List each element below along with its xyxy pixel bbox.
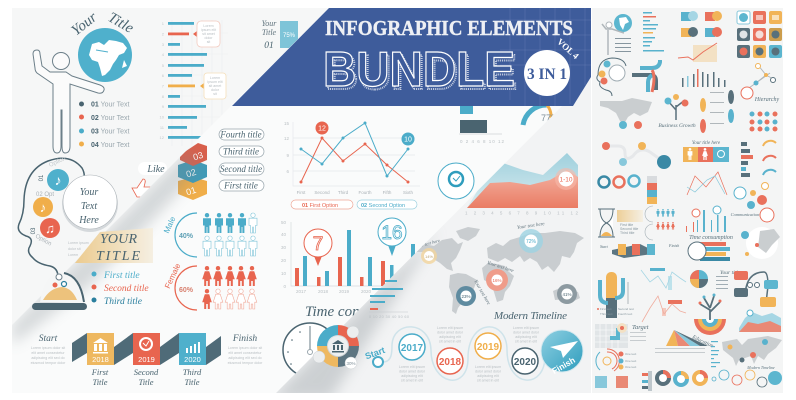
line chart: Third bbox=[338, 190, 349, 195]
alarm circle icon bbox=[438, 163, 474, 199]
legend: 03 Your Text bbox=[91, 128, 129, 136]
stacked blocks bbox=[178, 143, 207, 200]
pin: 7 bbox=[304, 229, 332, 266]
callout: upper: Lorem bbox=[203, 24, 214, 28]
mini bar chart: 1 bbox=[162, 21, 165, 26]
donut chart: 30% bbox=[346, 361, 356, 366]
finish label: Lorem ipsum dolor sit bbox=[228, 346, 262, 350]
head icon 02: 02 Opt bbox=[36, 192, 54, 198]
timeline text blocks: Lorem elit ipsum bbox=[513, 326, 539, 330]
list of titles: Third title bbox=[104, 297, 142, 307]
thumb: people tiles: Your title here bbox=[692, 141, 721, 146]
column chart: 2017 bbox=[296, 289, 307, 294]
77 percent gauge bbox=[520, 106, 554, 126]
year 2018 bbox=[437, 348, 463, 374]
tile captions: Title bbox=[138, 377, 154, 387]
mini bar chart bbox=[160, 22, 222, 139]
map bubble: 16%: 16% bbox=[492, 278, 502, 283]
thumb: time consumption: Time consumption bbox=[689, 235, 733, 241]
mini bar chart: 9 bbox=[162, 104, 165, 109]
start label: adipiscing elit sed do bbox=[31, 356, 65, 360]
head icon 01 note bbox=[39, 156, 69, 191]
line chart: 12 bbox=[318, 126, 326, 132]
panel: banner bbox=[232, 8, 591, 106]
ribbon timeline bbox=[72, 333, 221, 365]
clock bbox=[282, 322, 328, 374]
column chart: 0 bbox=[283, 284, 286, 289]
male outline people bbox=[203, 213, 257, 256]
lorem text: Lorem ipsum bbox=[68, 241, 89, 245]
timeline text blocks: dolor amet dolor bbox=[399, 370, 426, 374]
lorem text bbox=[68, 242, 88, 256]
line chart: 12 bbox=[284, 136, 289, 141]
timeline text blocks: adipiscing elit bbox=[439, 335, 461, 339]
area chart: 1-10 bbox=[559, 176, 573, 184]
title 01 block: 75% bbox=[283, 33, 296, 39]
column chart: 2020 bbox=[361, 289, 372, 294]
pin: 7: 7 bbox=[313, 234, 323, 255]
map bubble: 72%: 72% bbox=[526, 239, 537, 245]
line chart: 9 bbox=[286, 153, 289, 158]
mini bar chart: 5 bbox=[162, 63, 165, 68]
thumb: dark bars and gauges bbox=[741, 141, 776, 177]
timeline text blocks: Lorem elit ipsum bbox=[437, 326, 463, 330]
thumb: glasses head bbox=[734, 271, 778, 307]
horizontal mini bars: 0 10 20 30 40 50 60 bbox=[369, 315, 409, 319]
line chart bbox=[284, 121, 420, 195]
globe bbox=[78, 28, 132, 82]
head icon 01 note: ♪ bbox=[54, 172, 62, 188]
bundle word: BUNDLE bbox=[325, 46, 517, 100]
stick figure bbox=[33, 50, 104, 153]
world map bbox=[415, 227, 584, 314]
finish label bbox=[228, 334, 263, 365]
head outline bbox=[18, 158, 84, 277]
start label: Lorem ipsum dolor sit bbox=[31, 346, 65, 350]
chart legend pills bbox=[291, 200, 417, 209]
timeline text blocks: dolor amet dolor bbox=[437, 330, 464, 334]
legend: 02 Your Text bbox=[91, 115, 129, 122]
thumb: cactus chart bbox=[597, 272, 634, 318]
timeline text blocks: sit amet in elit bbox=[401, 378, 423, 382]
thumb: time consumption bbox=[688, 235, 733, 261]
your title gold banner: TITLE bbox=[96, 249, 140, 264]
legend: 04 Your Text bbox=[91, 142, 129, 149]
thumb: europe globe bbox=[741, 227, 780, 259]
stacked blocks: 03 bbox=[192, 150, 204, 162]
start label: eiusmod tempor dolor bbox=[31, 361, 66, 365]
callout: lower: ipsum elit bbox=[207, 80, 223, 84]
male gauge: Male bbox=[162, 215, 178, 235]
panel: thumbnail collage bbox=[592, 8, 783, 393]
thumb: icon tiles bbox=[737, 11, 782, 58]
title pills: Third title bbox=[223, 146, 259, 156]
thumb: map with bubbles bbox=[722, 336, 782, 366]
speech circle: Text bbox=[81, 201, 97, 212]
map bubble: 16% bbox=[486, 261, 515, 291]
thumb: growth chart bbox=[678, 43, 717, 62]
timeline text blocks: adipiscing elit bbox=[477, 374, 499, 378]
thumb: business growth tree bbox=[658, 94, 696, 129]
pin: 16 bbox=[378, 218, 406, 256]
thumb: area chart bbox=[739, 310, 781, 332]
thumb: footprints bbox=[700, 90, 734, 133]
tile captions: Title bbox=[92, 377, 108, 387]
thumb: head bbox=[597, 58, 626, 96]
speech circle: Here bbox=[78, 215, 99, 226]
title pills: Fourth title bbox=[219, 130, 262, 140]
horizontal mini bars bbox=[369, 280, 409, 319]
map bubble: 41%: 41% bbox=[562, 292, 572, 297]
year 2017 bbox=[399, 334, 425, 360]
3 in 1 badge: VOL 4 bbox=[555, 36, 581, 61]
panel: middle layer bbox=[178, 106, 554, 393]
line chart: Sixth bbox=[403, 190, 413, 195]
column chart: 50 bbox=[281, 220, 286, 225]
column chart: 20 bbox=[281, 258, 286, 263]
timeline path bbox=[383, 327, 545, 380]
cloche icon bbox=[32, 273, 87, 310]
mini bar chart: 4 bbox=[162, 52, 165, 57]
list of titles: Second title bbox=[104, 284, 149, 294]
column chart: 30 bbox=[281, 245, 286, 250]
timeline text blocks: Lorem elit ipsum bbox=[399, 365, 425, 369]
thumb: pipes bbox=[632, 60, 660, 92]
thumb: people tiles bbox=[683, 141, 729, 162]
callout: lower bbox=[200, 73, 226, 99]
column chart: 10 bbox=[281, 271, 286, 276]
tile captions: Second bbox=[134, 367, 159, 377]
heading: time consumption: Time consumption bbox=[305, 304, 415, 320]
timeline text blocks: sit amet in elit bbox=[515, 340, 537, 344]
year 2018: 2018 bbox=[439, 357, 462, 368]
speech circle bbox=[62, 175, 118, 232]
thumb: education pyramid: Education bbox=[690, 334, 714, 349]
line chart: Second bbox=[314, 190, 330, 195]
thumb: hourglass: Third title bbox=[620, 231, 634, 235]
callout: upper: ipsum elit bbox=[201, 28, 216, 32]
map bubble: 14%: Your text here bbox=[415, 238, 440, 249]
tile 2020: 2020 bbox=[184, 355, 201, 364]
line chart: 6 bbox=[286, 169, 289, 174]
timeline text blocks: dolor amet dolor bbox=[475, 370, 502, 374]
title pills: Second title bbox=[220, 164, 262, 174]
column chart bbox=[281, 220, 420, 294]
tile 2020 bbox=[179, 333, 206, 365]
callout: lower: sit amet bbox=[209, 84, 221, 88]
finish label: eiusmod tempor dolor bbox=[228, 361, 263, 365]
panel: map and timeline layer bbox=[276, 78, 591, 393]
female gauge: 60% bbox=[179, 287, 194, 294]
chart legend pills: 01 First Option bbox=[302, 203, 338, 209]
start marker: Start bbox=[364, 345, 386, 361]
thumb: segmented pie bbox=[690, 270, 741, 289]
head icon 02: ♪ bbox=[40, 200, 46, 215]
thumb: hierarchy bbox=[750, 97, 780, 132]
line chart: Fifth bbox=[383, 190, 392, 195]
thumb: hourglass bbox=[598, 209, 643, 237]
thumb: ring donuts bbox=[598, 176, 640, 188]
legend: 01 Your Text bbox=[91, 102, 129, 108]
title pills: First title bbox=[223, 180, 258, 190]
male gauge: 40% bbox=[179, 233, 194, 240]
thumb and like: Like bbox=[146, 164, 165, 175]
head icon 03: ♫ bbox=[45, 221, 55, 236]
list of titles: First title bbox=[103, 271, 140, 281]
thumb: mini ribbon timeline: Start bbox=[600, 244, 609, 249]
thumb: concentric arcs: One text bbox=[625, 352, 637, 356]
list of titles bbox=[92, 271, 149, 307]
column chart: 2019 bbox=[339, 289, 350, 294]
thumb: target grid bbox=[595, 323, 649, 348]
thumb: cactus chart: Second text bbox=[618, 307, 634, 311]
head icon 03: Option bbox=[34, 234, 52, 248]
thumb: cactus chart: First text bbox=[600, 307, 612, 311]
stacked blocks: 01 bbox=[185, 185, 197, 197]
female gauge bbox=[163, 261, 197, 310]
thumb: red line chart bbox=[642, 296, 686, 322]
female gauge: Female bbox=[163, 261, 183, 290]
callout: upper: sit bbox=[207, 40, 210, 44]
title 01 block: Title bbox=[262, 28, 277, 37]
thumb: business growth tree: Business Growth bbox=[658, 123, 696, 129]
start label bbox=[31, 334, 66, 365]
timeline text blocks: Lorem elit ipsum bbox=[475, 365, 501, 369]
callout: upper bbox=[193, 21, 220, 47]
callout: lower: sit bbox=[213, 92, 217, 96]
female people row bbox=[202, 266, 257, 309]
thumb: bars with pins bbox=[686, 206, 726, 232]
finish label: Finish bbox=[232, 334, 257, 344]
area chart bbox=[465, 153, 578, 216]
thumb: column chart bbox=[682, 69, 726, 87]
callout: upper: sit amet bbox=[202, 32, 215, 36]
thumb and like bbox=[132, 162, 167, 197]
thumb: blue line chart bbox=[641, 268, 686, 290]
globe title bbox=[70, 12, 133, 36]
mini bar chart: 3 bbox=[162, 42, 165, 47]
donut chart bbox=[313, 325, 359, 369]
thumb: education pyramid bbox=[655, 330, 714, 353]
thumb: mini tiles bbox=[595, 371, 652, 391]
timeline text blocks: sit amet in elit bbox=[439, 340, 461, 344]
mini bar chart: 7 bbox=[162, 84, 165, 88]
thumb: concentric arcs: One text bbox=[625, 365, 637, 369]
banner title: INFOGRAPHIC ELEMENTS bbox=[325, 16, 573, 40]
thumb: cactus chart: Fourth text bbox=[618, 312, 633, 316]
thumb: line chart bbox=[687, 172, 727, 195]
thumb: mini ribbon timeline: Finish bbox=[668, 243, 679, 248]
small bars near gauge: 0 2 4 6 8 10 12 bbox=[460, 139, 504, 144]
thumb: tree over rainbow bbox=[694, 294, 726, 335]
thumb: concentric arcs: One text bbox=[625, 359, 637, 363]
start label: elit amet consectetur bbox=[31, 351, 65, 355]
timeline text blocks: adipiscing elit bbox=[515, 335, 537, 339]
thumb: communication bubbles: Communication bbox=[731, 212, 760, 217]
pin: 16: 16 bbox=[381, 223, 403, 244]
head icon 03: 03 bbox=[31, 227, 37, 234]
thumb: block stack bbox=[647, 176, 657, 204]
map bubble: 23%: 23% bbox=[461, 294, 471, 299]
thumb: segmented pie: Your title bbox=[720, 270, 741, 276]
panel: top left layer bbox=[12, 12, 298, 324]
map bubble: 23%: Your text here bbox=[472, 280, 491, 307]
lorem text: dolor sit bbox=[68, 247, 81, 251]
map bubble: 41% bbox=[557, 284, 577, 304]
3 in 1 badge bbox=[524, 36, 581, 96]
line chart: 15 bbox=[284, 121, 289, 126]
thumb: communication bubbles bbox=[731, 182, 774, 222]
year 2019: 2019 bbox=[477, 342, 500, 353]
finish label: adipiscing elit sed do bbox=[228, 356, 262, 360]
thumb: network bbox=[741, 64, 776, 99]
head icon 01 note: Option bbox=[48, 156, 67, 169]
year 2019 bbox=[475, 333, 501, 359]
line chart: First bbox=[297, 190, 306, 195]
column chart: 2018 bbox=[318, 289, 329, 294]
column chart: 40 bbox=[281, 232, 286, 237]
lorem text: Lorem bbox=[68, 253, 78, 257]
start label: Start bbox=[39, 334, 58, 344]
area chart: 1 2 3 4 5 6 7 8 9 10 11 12 bbox=[465, 210, 578, 216]
callout: lower: dolor bbox=[211, 88, 220, 92]
77 percent gauge: 77% bbox=[541, 113, 559, 123]
timeline text blocks: adipiscing elit bbox=[401, 374, 423, 378]
tile 2018 bbox=[87, 333, 114, 365]
thumb: mini modern timeline: Modern Timeline bbox=[746, 365, 775, 370]
thumb: target grid: Target bbox=[632, 324, 649, 331]
thumb: hourglass: Second title bbox=[620, 227, 638, 231]
thumb: three wheel icons bbox=[655, 370, 708, 387]
stacked blocks: 02 bbox=[185, 167, 197, 179]
thumb: mini ribbon timeline bbox=[600, 243, 679, 258]
timeline text blocks: dolor amet dolor bbox=[513, 330, 540, 334]
thumb: hierarchy: Hierarchy bbox=[754, 97, 780, 103]
title 01 block: 01 bbox=[264, 41, 274, 51]
thumb: person and globe bbox=[602, 14, 632, 55]
mini bar chart: 10 bbox=[160, 114, 165, 120]
male people row bbox=[203, 213, 246, 233]
fold shadow on map layer bbox=[276, 242, 430, 393]
map bubble: 72% bbox=[517, 222, 546, 253]
globe title: Title bbox=[105, 10, 136, 37]
callout: lower: Lorem bbox=[210, 76, 220, 80]
thumb: hourglass: First title bbox=[620, 223, 633, 227]
bundle word: BUNDLE bbox=[323, 43, 515, 97]
your title gold banner: YOUR bbox=[100, 232, 137, 247]
globe title: Your bbox=[69, 9, 100, 39]
speech circle: Your bbox=[80, 187, 98, 198]
thumb: bars bbox=[643, 12, 664, 52]
thumb: concentric arcs bbox=[596, 349, 637, 371]
title 01 block bbox=[262, 20, 298, 48]
female outline people bbox=[213, 289, 257, 309]
line chart: 10 bbox=[404, 136, 412, 144]
male gauge bbox=[162, 213, 197, 257]
heading: modern timeline: Modern Timeline bbox=[493, 310, 567, 322]
tile captions: First bbox=[91, 367, 109, 377]
mini bar chart: 12 bbox=[160, 135, 165, 140]
thumb: vertical list bars bbox=[711, 341, 720, 367]
mini bar chart: 6 bbox=[162, 73, 165, 78]
thumb: mini modern timeline bbox=[712, 365, 782, 387]
line chart: Fourth bbox=[358, 190, 372, 195]
3 in 1 badge: 3 IN 1 bbox=[527, 66, 567, 83]
mini bar chart: 11 bbox=[160, 125, 165, 130]
tile captions bbox=[91, 367, 202, 387]
mini bar chart: 2 bbox=[162, 32, 165, 36]
year 2020 bbox=[512, 348, 538, 374]
timeline text blocks: sit amet in elit bbox=[477, 378, 499, 382]
head icon 02 bbox=[33, 192, 54, 217]
small bars near gauge bbox=[459, 106, 504, 144]
your title gold banner bbox=[75, 228, 153, 264]
map bubble: 23% bbox=[456, 280, 491, 307]
thumb: people gender bbox=[645, 206, 675, 240]
map bubble: 72%: Your text here bbox=[517, 222, 546, 231]
tile 2019: 2019 bbox=[138, 355, 155, 364]
thumb: small map and faces bbox=[600, 98, 652, 129]
thumb: cactus chart: Third text bbox=[600, 312, 613, 316]
map bubble: 14%: 14% bbox=[425, 254, 433, 259]
fold shadow on middle layer bbox=[12, 148, 200, 345]
callout: upper: dolor bbox=[204, 36, 213, 40]
legend bbox=[79, 102, 129, 149]
timeline text blocks bbox=[399, 326, 540, 382]
thumb: snake steps bbox=[602, 142, 671, 169]
year 2017: 2017 bbox=[401, 343, 424, 354]
thumb: pie cards bbox=[681, 11, 722, 37]
mini bar chart: 8 bbox=[162, 94, 165, 99]
finish label: elit amet consectetur bbox=[228, 351, 262, 355]
title pills bbox=[219, 129, 264, 191]
title 01 block: Your bbox=[262, 19, 277, 28]
tile captions: Third bbox=[183, 367, 202, 377]
finish badge with paper plane: Finish bbox=[550, 355, 577, 376]
chart legend pills: 02 Second Option bbox=[361, 203, 405, 209]
tile 2019 bbox=[133, 333, 160, 365]
map bubble: 14% bbox=[415, 238, 440, 264]
head icon 01 note: 01 bbox=[39, 174, 45, 181]
map bubble: 16%: Your text here bbox=[486, 261, 515, 274]
finish badge with paper plane bbox=[541, 330, 583, 376]
tile captions: Title bbox=[184, 377, 200, 387]
tile 2018: 2018 bbox=[92, 355, 109, 364]
head icon 03 bbox=[31, 218, 60, 248]
year 2020: 2020 bbox=[514, 357, 537, 368]
